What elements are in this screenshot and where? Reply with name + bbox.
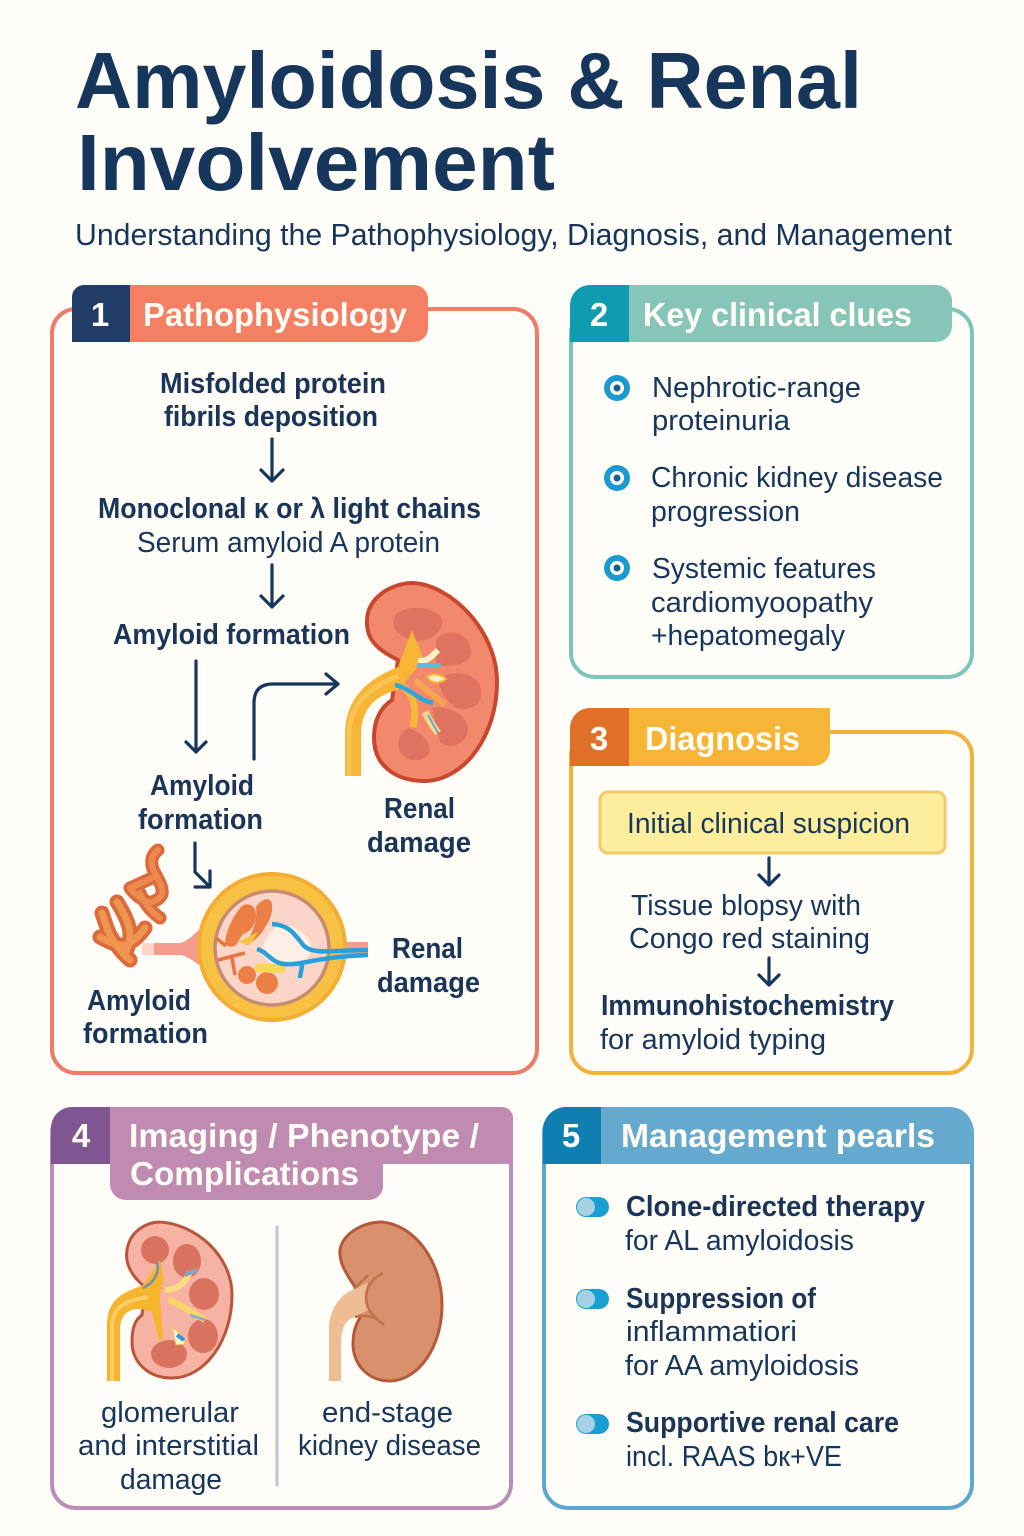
arrow	[195, 843, 210, 887]
bullet item: proteinuria: proteinuria	[652, 405, 791, 437]
item: clone-directed therapy: for AL amyloidosis	[625, 1225, 854, 1257]
arrow	[759, 858, 779, 885]
bullet item: ckd: progression	[651, 496, 800, 528]
panel: diagnosis	[570, 708, 972, 1073]
text: renal damage: Renal	[384, 793, 455, 825]
label: glomerular damage: and interstitial	[78, 1430, 259, 1462]
panel: management pearls	[543, 1107, 973, 1508]
bullet item: proteinuria: Nephrotic-range	[652, 372, 861, 404]
box: initial clinical suspicion	[600, 792, 945, 853]
text: amyloid formation 2: Amyloid	[150, 770, 254, 802]
text: light chains: Serum amyloid A protein	[137, 527, 440, 559]
text: amyloid formation 2: formation	[138, 804, 263, 836]
header: pathophysiology: Pathophysiology	[143, 296, 408, 333]
header: imaging phenotype complications	[51, 1107, 513, 1200]
text: tissue biopsy: Congo red staining	[629, 923, 870, 955]
item: suppression of inflammation: Suppression of	[626, 1283, 816, 1315]
bullet item: ckd	[604, 462, 943, 528]
text: misfolded protein	[160, 368, 386, 433]
header: management pearls	[543, 1107, 973, 1164]
bullet item: systemic features: +hepatomegaly	[651, 620, 845, 652]
header: pathophysiology: 1	[91, 296, 109, 333]
box: initial clinical suspicion: Initial clinical suspicion	[627, 808, 910, 840]
arrow	[759, 958, 779, 985]
header: imaging phenotype complications: Complications	[130, 1155, 359, 1192]
label: end-stage kidney disease: kidney disease	[298, 1430, 481, 1462]
text: renal damage: damage	[367, 827, 471, 859]
item: supportive renal care	[576, 1407, 899, 1473]
title: Amyloidosis & Renal	[75, 36, 862, 125]
header: diagnosis	[570, 708, 830, 766]
label: glomerular damage	[78, 1397, 259, 1496]
panel: pathophysiology	[52, 285, 537, 1073]
panel: key clinical clues	[570, 285, 972, 677]
text: amyloid formation 2	[138, 770, 263, 836]
text: light chains	[98, 493, 481, 559]
header: imaging phenotype complications: 4	[72, 1117, 91, 1154]
text: tissue biopsy	[629, 890, 870, 955]
text: tissue biopsy: Tissue blopsy with	[631, 890, 861, 922]
label: glomerular damage: glomerular	[101, 1397, 239, 1429]
text: amyloid formation 3: formation	[83, 1018, 208, 1050]
header: imaging phenotype complications: Imaging / Phenotype /	[129, 1117, 479, 1154]
bullet item: ckd: Chronic kidney disease	[651, 462, 943, 494]
item: supportive renal care: incl. RAAS bк+VE	[626, 1441, 842, 1473]
item: supportive renal care: Supportive renal care	[626, 1407, 899, 1439]
header: diagnosis: Diagnosis	[645, 720, 800, 757]
arrow	[261, 565, 283, 607]
item: clone-directed therapy: Clone-directed therapy	[626, 1191, 925, 1223]
text: immunohistochemistry	[600, 990, 894, 1056]
icon: kidney	[345, 583, 497, 781]
item: suppression of inflammation: inflammatiori	[626, 1316, 797, 1348]
text: light chains: Monoclonal κ or λ light chains	[98, 493, 481, 525]
title	[75, 36, 862, 207]
icon: damaged kidney	[107, 1222, 232, 1381]
header: diagnosis: 3	[590, 720, 608, 757]
text: amyloid formation 3	[83, 985, 208, 1050]
text: renal damage 2: Renal	[392, 933, 463, 965]
icon: amyloid fibrils	[100, 850, 162, 960]
text: renal damage 2	[377, 933, 480, 999]
arrow	[261, 439, 283, 481]
header: pathophysiology	[72, 285, 428, 342]
icon: end-stage kidney	[329, 1222, 442, 1381]
text: renal damage 2: damage	[377, 967, 480, 999]
item: suppression of inflammation	[576, 1283, 859, 1382]
text: amyloid formation 3: Amyloid	[87, 985, 191, 1017]
header: key clinical clues: 2	[590, 296, 608, 333]
header: management pearls: 5	[562, 1117, 580, 1154]
label: glomerular damage: damage	[120, 1464, 222, 1496]
bullet item: proteinuria	[604, 372, 861, 437]
header: key clinical clues: Key clinical clues	[643, 296, 912, 333]
text: immunohistochemistry: for amyloid typing	[600, 1024, 826, 1056]
arrow	[186, 661, 206, 752]
header: management pearls: Management pearls	[621, 1117, 935, 1154]
panel: imaging phenotype complications	[51, 1107, 513, 1508]
text: amyloid formation: Amyloid formation	[113, 619, 350, 651]
label: end-stage kidney disease: end-stage	[322, 1397, 453, 1429]
item: clone-directed therapy	[576, 1191, 925, 1257]
bullet item: systemic features: Systemic features	[652, 553, 876, 585]
item: suppression of inflammation: for AA amyloidosis	[625, 1350, 859, 1382]
subtitle: Understanding the Pathophysiology, Diagnosis, and Management	[75, 217, 952, 252]
text: renal damage	[367, 793, 471, 859]
divider	[276, 1227, 278, 1485]
bullet item: systemic features	[604, 553, 876, 652]
text: misfolded protein: fibrils deposition	[164, 401, 378, 433]
text: misfolded protein: Misfolded protein	[160, 368, 386, 400]
header: key clinical clues	[570, 285, 952, 342]
elbow arrow	[254, 674, 338, 759]
title: Involvement	[77, 118, 555, 207]
bullet item: systemic features: cardiomyoopathy	[651, 587, 874, 619]
text: immunohistochemistry: Immunohistochemistry	[601, 990, 894, 1022]
label: end-stage kidney disease	[298, 1397, 481, 1462]
icon: glomerulus cross-section	[142, 874, 368, 1020]
